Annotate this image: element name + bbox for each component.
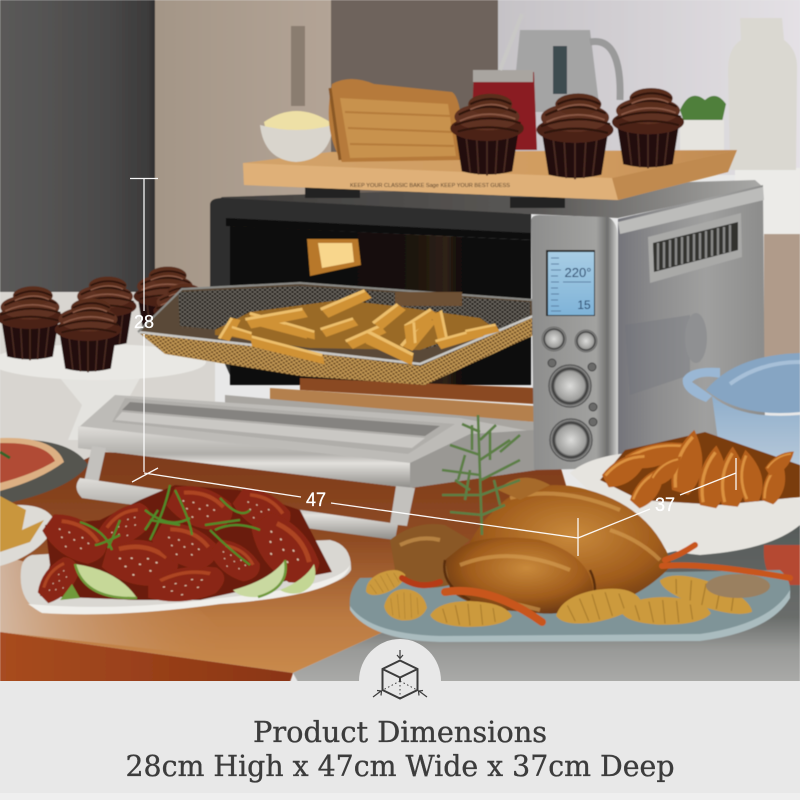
roast platter: [350, 415, 790, 642]
depth line: [578, 458, 736, 538]
oven light: [307, 239, 361, 276]
side dial recess: [685, 313, 707, 363]
oven racks: [225, 378, 535, 436]
grey counter: [293, 520, 800, 682]
side vent: [648, 213, 742, 283]
cupboard right: [764, 234, 800, 364]
pale wall: [498, 0, 800, 175]
air fry basket: [138, 283, 533, 385]
dimension lines: [130, 178, 736, 556]
board feet: [305, 186, 565, 208]
pizza on slate: [0, 438, 88, 505]
potato wedges: [599, 429, 800, 513]
table sheen: [0, 555, 250, 660]
oven cavity: [230, 226, 531, 385]
icon badge: [359, 639, 441, 723]
LCD display: 220°: [564, 265, 592, 280]
bamboo cutting board: KEEP YOUR CLASSIC BAKE Sage KEEP YOUR BEST GUESS: [350, 183, 510, 189]
fridge: [0, 0, 165, 300]
hasselback potatoes: [361, 564, 757, 630]
chicken wings: [32, 478, 332, 608]
shallot: [706, 574, 770, 598]
fries: [215, 284, 500, 366]
LCD display: [546, 250, 595, 316]
left cupcakes: [0, 267, 211, 372]
wedges bowl: [570, 429, 800, 555]
plant: [680, 96, 726, 122]
door legs and bar: [76, 446, 415, 540]
depth label: 37: [655, 495, 675, 516]
oven top face: [210, 180, 763, 218]
icon: cube with arrows: [373, 650, 427, 698]
ceramic jar: [728, 18, 797, 170]
roast carrots: [402, 545, 790, 622]
oven front frame: [210, 198, 531, 375]
bowl with butter: [260, 111, 333, 162]
open door: [78, 395, 536, 488]
small buttons: [548, 359, 597, 426]
jam jar: [472, 14, 537, 150]
wings platter: [21, 478, 351, 614]
table front edge: [0, 632, 293, 682]
lime wedges: [60, 560, 315, 600]
oven side face: [618, 185, 765, 470]
toast: [329, 79, 462, 162]
blue casserole pot: [683, 353, 800, 470]
knobs: [542, 327, 597, 461]
oven: [76, 180, 765, 540]
control panel: [531, 215, 618, 470]
sauce dish: [764, 545, 800, 585]
back counter: [735, 168, 800, 236]
width line: [132, 468, 578, 556]
height label: 28: [134, 312, 154, 332]
spring onion garnish: [80, 485, 260, 565]
footer panel: [0, 639, 800, 800]
LCD display: 15: [577, 298, 591, 312]
wooden cabinet: [155, 0, 331, 292]
width label: 47: [306, 490, 326, 511]
dark wall panel: [331, 0, 499, 195]
floor: [0, 292, 215, 472]
height line: [130, 178, 158, 472]
dimensions text: 28cm High x 47cm Wide x 37cm Deep: [126, 749, 674, 783]
kettle: [512, 30, 620, 112]
roast chicken: [390, 478, 672, 614]
board cupcakes: [450, 88, 684, 179]
bamboo cutting board: [243, 150, 737, 200]
heading: Product Dimensions: [253, 715, 547, 749]
fries plate: [0, 496, 56, 566]
wooden table top: [0, 452, 600, 673]
rosemary sprig: [442, 415, 520, 535]
cake stand: [0, 344, 206, 440]
cabinet handle: [291, 26, 305, 106]
